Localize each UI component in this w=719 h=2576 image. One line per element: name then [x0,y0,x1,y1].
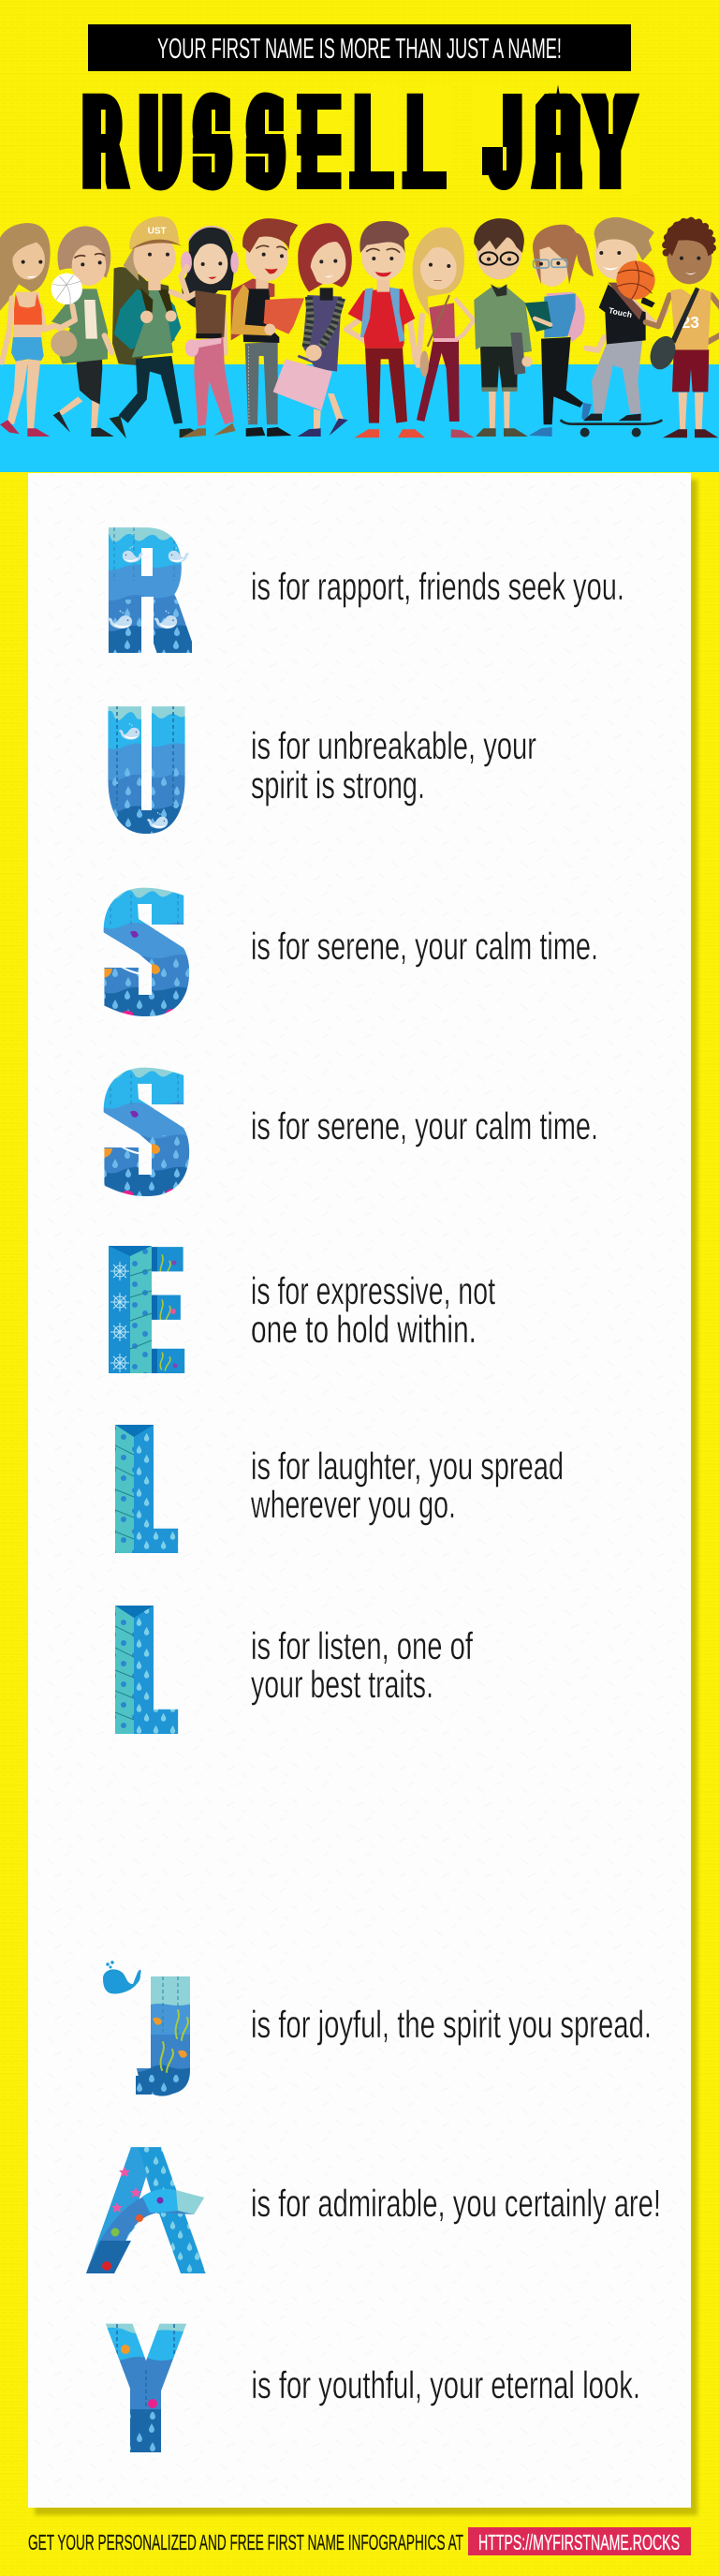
crowd of students [0,216,719,438]
text: L lines 2: your best traits. [251,1663,433,1706]
person 6: girl with red bob and pink bag [273,223,352,437]
person 4: girl with headphones [171,227,239,437]
person 11: skater boy with basketball [561,217,666,437]
person 1: girl in orange top [0,223,71,437]
letter S [103,888,189,1016]
letter L (second) [115,1606,178,1734]
title: RUSSELL JAY: RUSSELL JAY [84,84,629,200]
person 12: boy with curly hair and jersey: 23 [682,313,699,332]
letter Y [105,2323,187,2452]
person 3: boy with cap and backpack [110,216,203,438]
white panel [28,473,691,2508]
letter U [103,705,187,834]
person 2: girl with volleyball [51,227,114,437]
text: U lines: is for unbreakable, your [251,724,536,767]
title foot extensions [297,94,580,189]
text: E lines [251,1269,495,1351]
title counters and slits [101,86,639,193]
arch band on A [86,2167,204,2273]
person 11: skater boy with basketball: Touch [608,305,633,319]
text: L lines 2 [251,1624,473,1706]
text: L lines 1 [250,1444,564,1526]
whale above J [103,1961,141,1994]
person 12: boy with curly hair and jersey [646,218,719,437]
person 5: boy with red hair and book [231,218,304,437]
blue floor band [0,364,719,472]
letter J [136,1976,190,2096]
text: E lines: is for expressive, not [251,1269,495,1312]
person 9: boy with glasses and laptop [474,218,533,437]
person 10: girl with ponytail and tablet [525,225,594,437]
person 8: blonde girl [413,228,475,437]
whales on U [119,723,168,829]
panel shadow [35,480,697,2515]
person 3: boy with cap and backpack: UST [148,226,167,236]
letter E [109,1246,185,1373]
letter L [115,1425,178,1553]
letter R [98,527,192,653]
letter S (second) [103,1068,189,1196]
person 7: boy in red t-shirt [346,221,425,437]
text: L lines 2: is for listen, one of [251,1624,473,1667]
text: U lines [251,724,536,807]
letter A [86,2147,206,2273]
text: U lines: spirit is strong. [251,763,425,807]
whales on R [108,546,189,629]
text: E lines: one to hold within. [251,1308,477,1351]
text: L lines 1: is for laughter, you spread [251,1444,564,1488]
tagline banner [88,24,631,71]
text: L lines 1: wherever you go. [250,1483,456,1526]
